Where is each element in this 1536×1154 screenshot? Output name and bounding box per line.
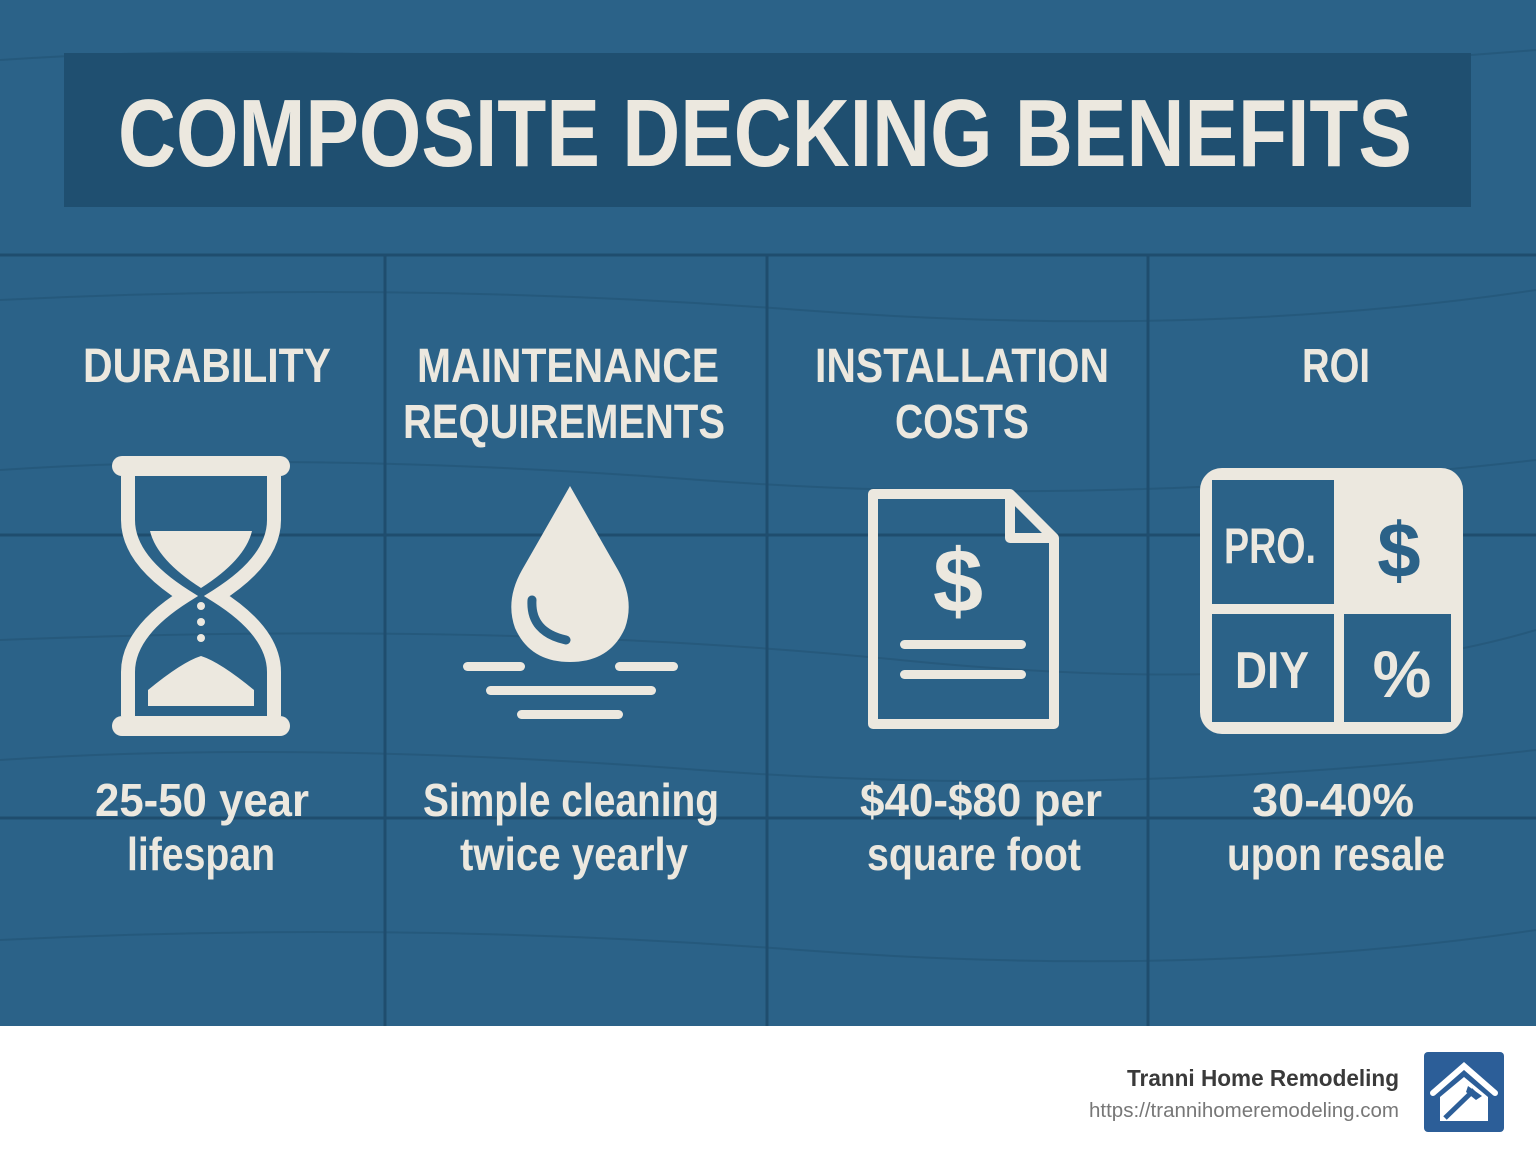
panel: maintenance: REQUIREMENTS <box>403 396 725 449</box>
icon: logo house <box>1424 1052 1504 1132</box>
icon: invoice document: $ <box>933 532 983 632</box>
icon: water drop <box>463 486 678 719</box>
icon: ROI grid: DIY <box>1235 642 1309 700</box>
heading: installation: INSTALLATION <box>815 340 1109 393</box>
heading: ROI: ROI <box>1302 340 1370 393</box>
panel: ROI <box>1200 340 1463 880</box>
panel: ROI: upon resale <box>1227 828 1445 880</box>
heading: durability: DURABILITY <box>83 340 331 393</box>
icon: ROI grid <box>1200 468 1463 734</box>
panel: durability: lifespan <box>127 828 275 880</box>
panel: installation costs: square foot <box>867 828 1081 880</box>
panel: durability <box>83 340 331 880</box>
icon: ROI grid: $ <box>1377 506 1421 594</box>
footer brand <box>1089 1052 1504 1132</box>
panel: maintenance <box>403 340 725 880</box>
icon: ROI grid: PRO. <box>1224 518 1316 574</box>
text: lifespan: 25-50 year <box>95 774 309 826</box>
heading: maintenance: MAINTENANCE <box>417 340 719 393</box>
text: resale: 30-40% <box>1252 774 1414 826</box>
panel: maintenance: twice yearly <box>460 828 688 880</box>
footer brand: https://trannihomeremodeling.com <box>1089 1100 1399 1122</box>
text: cleaning: Simple cleaning <box>423 774 719 826</box>
text: cost per sq ft: $40-$80 per <box>860 774 1102 826</box>
panel: installation costs <box>815 340 1109 880</box>
title banner <box>64 53 1471 207</box>
icon: ROI grid: % <box>1373 637 1431 711</box>
icon: hourglass <box>112 456 290 736</box>
footer brand: Tranni Home Remodeling <box>1127 1065 1399 1091</box>
panel: installation costs: COSTS <box>895 396 1029 449</box>
icon: invoice document <box>873 494 1054 724</box>
